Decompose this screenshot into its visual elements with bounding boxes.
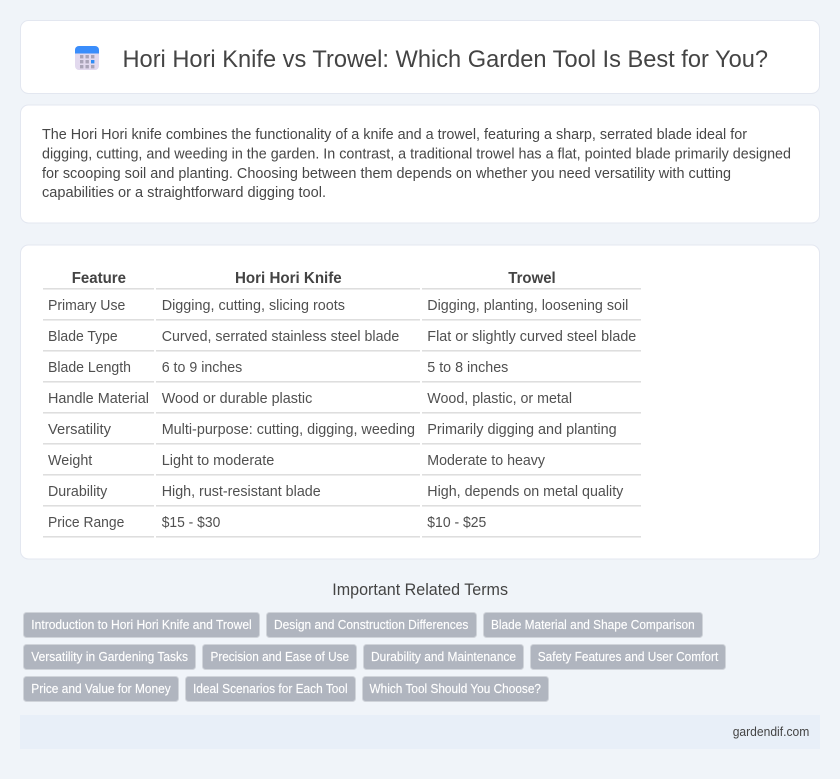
title: Hori Hori Knife vs Trowel: Which Garden Tool Is Best for You? <box>122 46 768 73</box>
row: weight: Light to moderate <box>162 453 274 469</box>
row: price range: $15 - $30 <box>162 515 220 531</box>
row: primary use: Digging, planting, loosening soil <box>427 298 628 314</box>
tag <box>362 676 548 702</box>
row: durability: High, rust-resistant blade <box>162 484 321 500</box>
tag <box>24 644 196 670</box>
tag: Ideal Scenarios for Each Tool <box>193 682 348 696</box>
tag <box>24 676 178 702</box>
text block: introduction paragraph: for scooping soil and planting. Choosing between them depends on whether you need versatility with cutting <box>42 166 731 182</box>
tag <box>24 612 260 638</box>
row: versatility <box>43 422 641 445</box>
row: blade length <box>43 360 641 383</box>
row: blade type: Flat or slightly curved steel blade <box>427 329 636 345</box>
tag list: related terms <box>24 612 726 702</box>
tag: Durability and Maintenance <box>371 650 516 664</box>
row: primary use <box>43 298 641 321</box>
panel: introduction <box>20 105 820 223</box>
row: primary use: Digging, cutting, slicing roots <box>162 298 345 314</box>
tag: Price and Value for Money <box>31 682 171 696</box>
row: handle material: Wood, plastic, or metal <box>427 391 572 407</box>
tag: Introduction to Hori Hori Knife and Trowel <box>31 618 252 632</box>
tag: Precision and Ease of Use <box>210 650 349 664</box>
row: blade length: 5 to 8 inches <box>427 360 508 376</box>
row: durability: Durability <box>48 484 108 500</box>
text block: introduction paragraph: The Hori Hori knife combines the functionality of a knife and a trowel, featuring a sharp, serrated blade ideal for <box>42 127 747 143</box>
row: durability <box>43 484 641 507</box>
row: versatility: Multi-purpose: cutting, digging, weeding <box>162 422 415 438</box>
row: blade type: Blade Type <box>48 329 118 345</box>
tag <box>484 612 702 638</box>
tag: Blade Material and Shape Comparison <box>491 618 695 632</box>
tag: Safety Features and User Comfort <box>538 650 719 664</box>
footer source text: gardendif.com <box>733 725 809 739</box>
panel: title card <box>20 20 820 94</box>
tag: Versatility in Gardening Tasks <box>31 650 188 664</box>
table header: Feature <box>72 270 126 287</box>
row: blade length: 6 to 9 inches <box>162 360 242 376</box>
row: versatility: Primarily digging and planting <box>427 422 617 438</box>
row: handle material: Wood or durable plastic <box>162 391 312 407</box>
table header: Hori Hori Knife <box>235 270 342 287</box>
row: price range: Price Range <box>48 515 124 531</box>
row: price range: $10 - $25 <box>427 515 486 531</box>
row: weight: Moderate to heavy <box>427 453 546 469</box>
row: handle material: Handle Material <box>48 391 149 407</box>
heading: important related terms: Important Related Terms <box>332 581 508 599</box>
row: durability: High, depends on metal quality <box>427 484 624 500</box>
row: price range <box>43 515 641 538</box>
row: weight <box>43 453 641 476</box>
text block: introduction paragraph: digging, cutting, and weeding in the garden. In contrast, a traditional trowel has a flat, pointed blade primarily designed <box>42 146 791 162</box>
row: blade length: Blade Length <box>48 360 131 376</box>
tag <box>186 676 356 702</box>
row: versatility: Versatility <box>48 422 112 438</box>
text block: introduction paragraph: capabilities or a straightforward digging tool. <box>42 185 326 201</box>
tag: Design and Construction Differences <box>274 618 468 632</box>
table header <box>43 270 641 290</box>
footer bar <box>20 715 820 749</box>
tag: Which Tool Should You Choose? <box>370 682 541 696</box>
row: blade type <box>43 329 641 352</box>
tag <box>266 612 476 638</box>
row: handle material <box>43 391 641 414</box>
tag <box>202 644 356 670</box>
tag <box>530 644 726 670</box>
table header: Trowel <box>508 270 556 287</box>
icon: calendar <box>75 46 99 70</box>
panel: comparison table <box>20 245 820 559</box>
row: weight: Weight <box>48 453 92 469</box>
tag <box>364 644 524 670</box>
row: primary use: Primary Use <box>48 298 125 314</box>
row: blade type: Curved, serrated stainless steel blade <box>162 329 399 345</box>
text block: introduction paragraph <box>42 127 791 201</box>
